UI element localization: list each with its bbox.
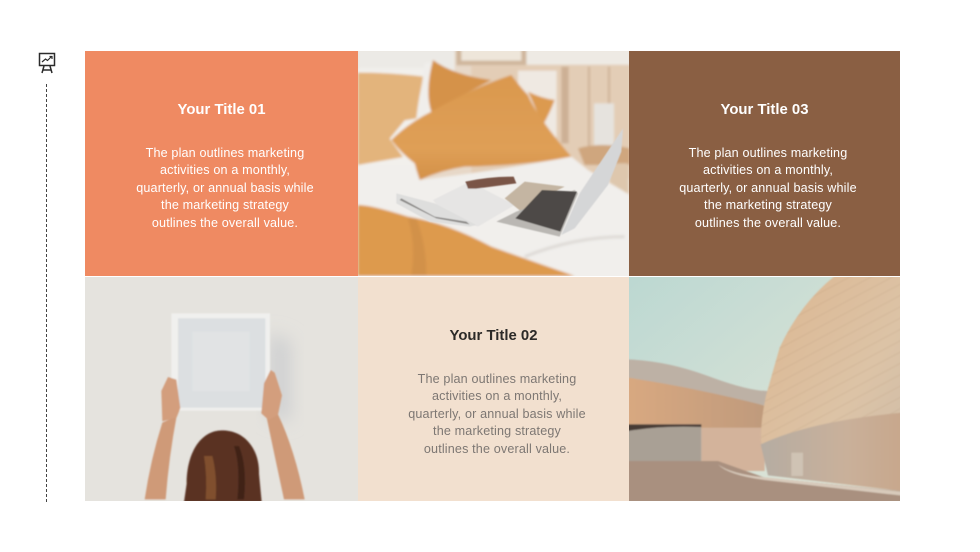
text block: title 01 description: outlines the overall value. <box>152 216 298 230</box>
heading: title 02: Your Title 02 <box>450 328 538 344</box>
panel: title 01 <box>85 51 358 276</box>
text block: title 03 description: outlines the overall value. <box>695 216 841 230</box>
text block: title 03 description: quarterly, or annual basis while <box>679 180 857 194</box>
text block: title 03 description <box>679 146 857 230</box>
heading: title 03: Your Title 03 <box>720 102 808 118</box>
text block: title 02 description: The plan outlines marketing <box>418 372 576 386</box>
panel: woman holding frame photo <box>85 277 358 501</box>
heading: title 01: Your Title 01 <box>178 102 266 118</box>
text block: title 01 description: activities on a monthly, <box>160 163 290 177</box>
text block: title 02 description: quarterly, or annual basis while <box>408 406 586 420</box>
text block: title 01 description: the marketing strategy <box>161 198 289 212</box>
text block: title 02 description: activities on a monthly, <box>432 389 562 403</box>
text block: title 02 description: the marketing strategy <box>433 424 561 438</box>
panel: title 03 <box>629 51 900 276</box>
panel: bedroom photo <box>358 51 629 276</box>
text block: title 01 description: The plan outlines marketing <box>146 146 304 160</box>
text block: title 02 description: outlines the overall value. <box>424 442 570 456</box>
icon: presentation board <box>38 52 56 74</box>
panel: architecture photo <box>629 277 900 501</box>
text block: title 03 description: activities on a monthly, <box>703 163 833 177</box>
text block: title 03 description: the marketing strategy <box>704 198 832 212</box>
dashed timeline line <box>46 84 47 502</box>
text block: title 03 description: The plan outlines marketing <box>689 146 847 160</box>
panel: title 02 <box>358 277 629 501</box>
text block: title 02 description <box>408 372 586 456</box>
text block: title 01 description: quarterly, or annual basis while <box>136 180 314 194</box>
text block: title 01 description <box>136 146 314 230</box>
